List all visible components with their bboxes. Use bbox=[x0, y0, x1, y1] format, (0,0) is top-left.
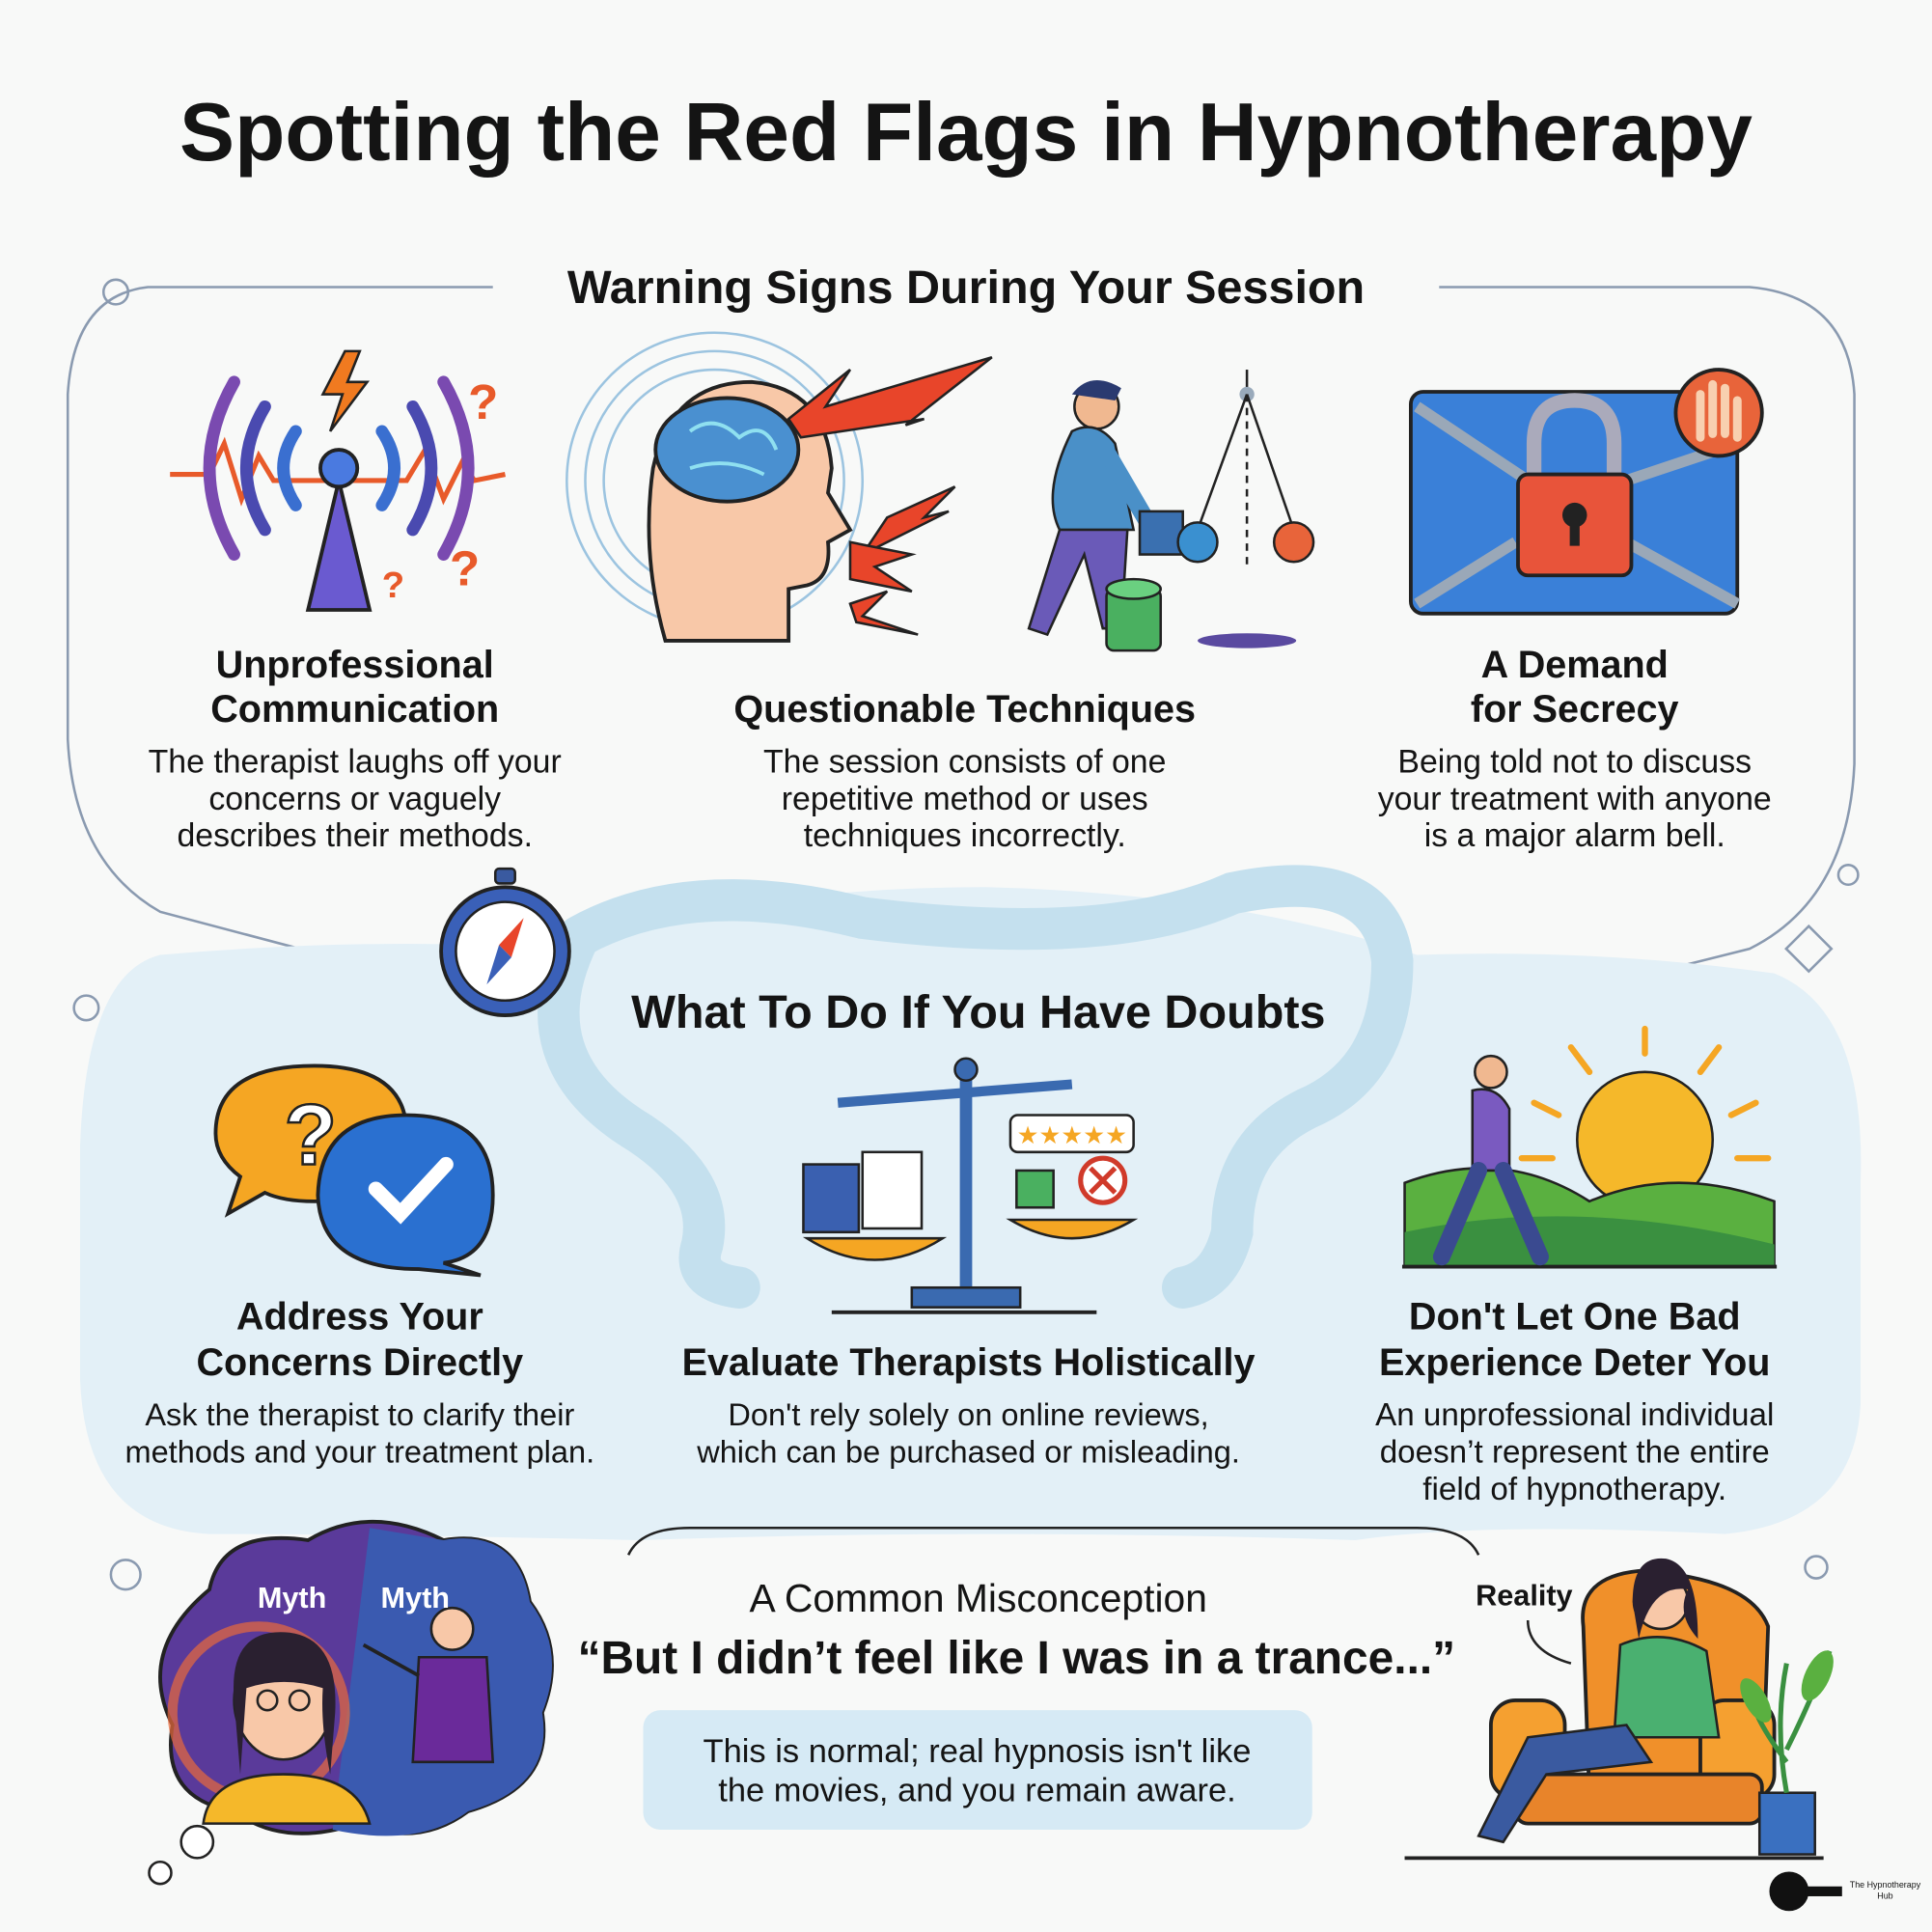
bottom bracket bbox=[628, 1528, 1478, 1555]
icon: head brain techniques bbox=[566, 333, 992, 641]
text block: unprofessional communication: The therapist laughs off your bbox=[149, 744, 562, 781]
text block: don't let one bad experience: Experience Deter You bbox=[1379, 1341, 1770, 1384]
text block: address concerns: methods and your treatment plan. bbox=[124, 1435, 594, 1470]
text block: don't let one bad experience: An unprofessional individual bbox=[1375, 1397, 1774, 1433]
icon: reality woman in chair bbox=[1405, 1559, 1840, 1858]
text block: questionable techniques: Questionable Techniques bbox=[733, 688, 1196, 731]
text block: demand for secrecy: for Secrecy bbox=[1471, 688, 1679, 731]
text block: misconception: A Common Misconception bbox=[750, 1576, 1207, 1620]
icon: walker and sunrise bbox=[1402, 1029, 1777, 1267]
text block: evaluate holistically: Don't rely solely on online reviews, bbox=[728, 1397, 1209, 1432]
heading: warning signs: Warning Signs During Your Session bbox=[567, 262, 1365, 314]
text block: address concerns: Address Your bbox=[236, 1296, 483, 1339]
text block: don't let one bad experience: Don't Let One Bad bbox=[1409, 1296, 1741, 1339]
panel: warning signs outline bbox=[68, 280, 1858, 1589]
logo: The Hypnotherapy bbox=[1850, 1880, 1921, 1890]
text block: unprofessional communication bbox=[149, 644, 562, 854]
text block: demand for secrecy: is a major alarm bell. bbox=[1424, 817, 1725, 854]
icon: signal tower: ? bbox=[468, 374, 498, 429]
text block: demand for secrecy: A Demand bbox=[1481, 644, 1669, 686]
text block: unprofessional communication: Unprofessional bbox=[216, 644, 494, 686]
logo: Hub bbox=[1877, 1891, 1893, 1901]
text block: misconception: “But I didn’t feel like I was in a trance...” bbox=[578, 1633, 1455, 1684]
panel: doubts background bbox=[80, 887, 1861, 1540]
text block: unprofessional communication: describes their methods. bbox=[177, 817, 533, 854]
text block: questionable techniques: repetitive method or uses bbox=[782, 781, 1148, 817]
text block: demand for secrecy bbox=[1378, 644, 1772, 854]
text block: misconception bbox=[578, 1576, 1455, 1684]
text block: address concerns bbox=[124, 1296, 594, 1470]
icon: balance scale: ★★★★★ bbox=[1017, 1122, 1127, 1149]
text block: unprofessional communication: Communication bbox=[210, 688, 499, 731]
text block: demand for secrecy: Being told not to discuss bbox=[1397, 744, 1752, 781]
icon: balance scale bbox=[803, 1059, 1134, 1312]
icon: person with puzzle and pendulum bbox=[1029, 370, 1313, 650]
text block: demand for secrecy: your treatment with anyone bbox=[1378, 781, 1772, 817]
logo bbox=[1769, 1871, 1921, 1911]
text block: questionable techniques: The session consists of one bbox=[763, 744, 1166, 781]
text block: questionable techniques: techniques incorrectly. bbox=[804, 817, 1126, 854]
icon: myth cloud bbox=[149, 1522, 552, 1884]
callout: this is normal: the movies, and you remain aware. bbox=[718, 1773, 1236, 1809]
icon: signal tower: ? bbox=[382, 565, 404, 606]
icon: compass bbox=[441, 869, 569, 1015]
heading: doubts: What To Do If You Have Doubts bbox=[631, 986, 1325, 1038]
text block: address concerns: Concerns Directly bbox=[196, 1341, 523, 1384]
text block: questionable techniques bbox=[733, 688, 1196, 854]
text block: don't let one bad experience: doesn’t represent the entire bbox=[1380, 1435, 1770, 1471]
text block: unprofessional communication: concerns or vaguely bbox=[208, 781, 501, 817]
icon: reality woman in chair: Reality bbox=[1476, 1580, 1573, 1613]
icon: speech bubbles: ? bbox=[284, 1087, 337, 1183]
text block: don't let one bad experience bbox=[1375, 1296, 1774, 1507]
icon: myth cloud: Myth bbox=[258, 1582, 326, 1615]
icon: locked secrecy bbox=[1411, 370, 1762, 614]
title: Spotting the Red Flags in Hypnotherapy bbox=[179, 87, 1753, 179]
callout: this is normal: This is normal; real hypnosis isn't like bbox=[704, 1733, 1251, 1770]
text block: evaluate holistically bbox=[682, 1341, 1256, 1470]
icon: speech bubbles bbox=[215, 1065, 493, 1275]
callout: this is normal bbox=[643, 1710, 1312, 1830]
icon: winding path bbox=[559, 886, 1393, 1287]
text block: don't let one bad experience: field of hypnotherapy. bbox=[1422, 1472, 1726, 1507]
icon: signal tower: ? bbox=[450, 540, 480, 595]
icon: signal tower bbox=[170, 351, 505, 610]
text block: address concerns: Ask the therapist to clarify their bbox=[145, 1397, 574, 1432]
icon: myth cloud: Myth bbox=[381, 1582, 450, 1615]
text block: evaluate holistically: Evaluate Therapists Holistically bbox=[682, 1341, 1256, 1384]
text block: evaluate holistically: which can be purchased or misleading. bbox=[696, 1435, 1240, 1470]
